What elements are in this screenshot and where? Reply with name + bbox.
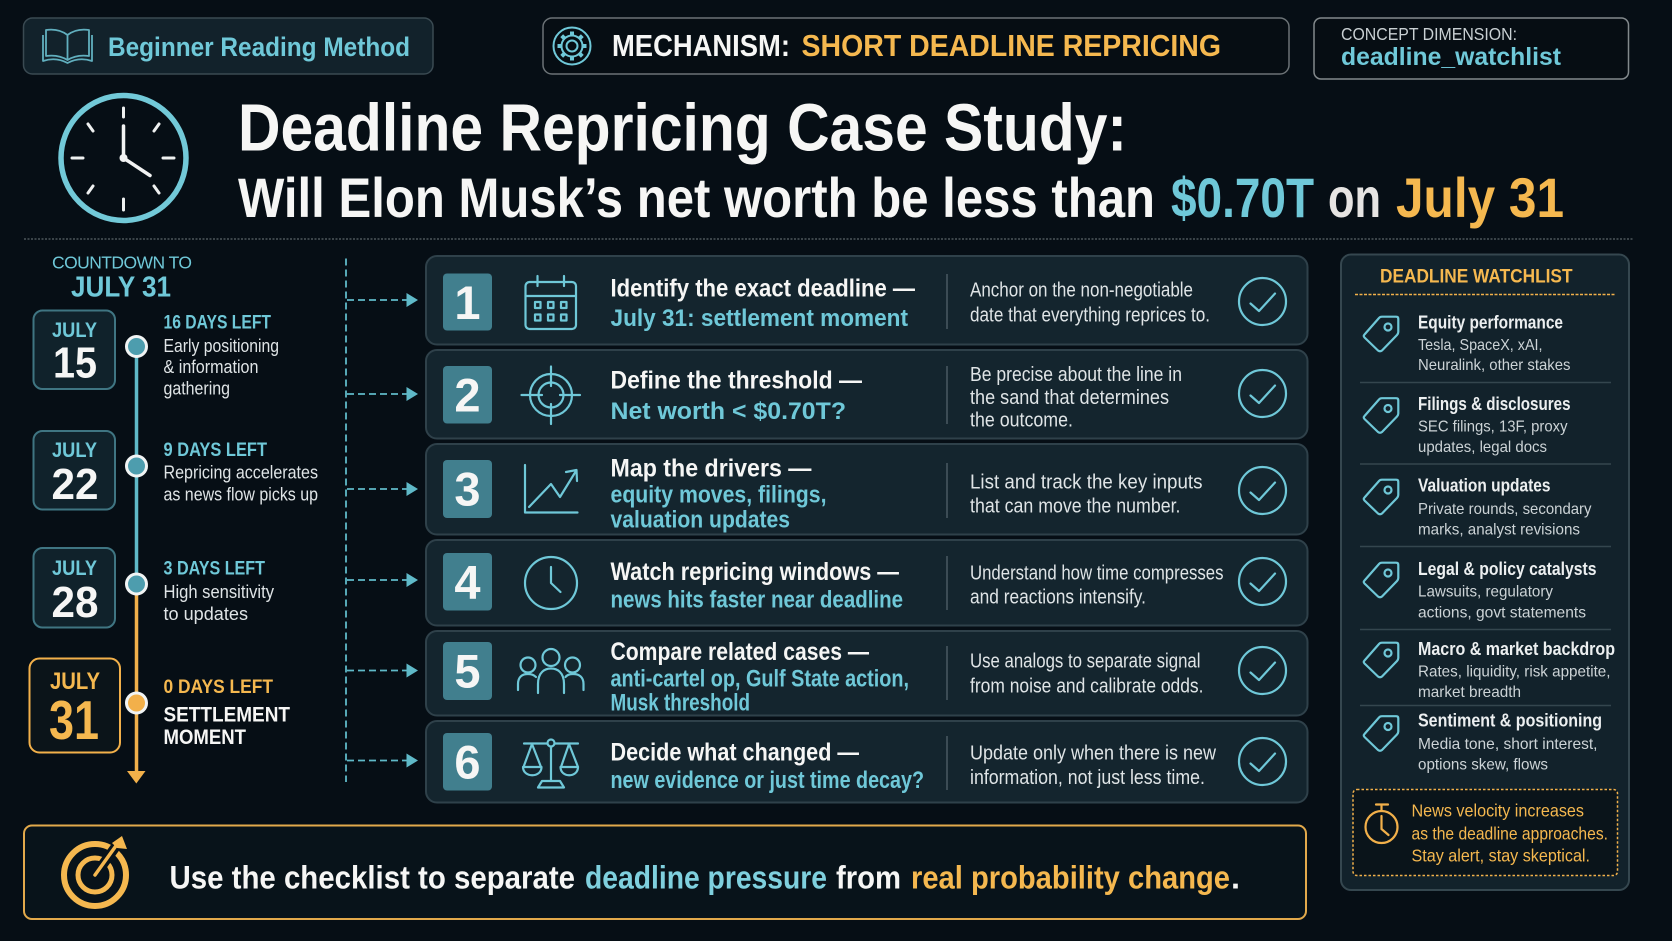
step number 3: 3 bbox=[454, 462, 481, 516]
step 6 description bbox=[970, 742, 1216, 789]
step number 4 bbox=[443, 553, 492, 610]
badge: mechanism bbox=[543, 18, 1289, 74]
panel: step 6 bbox=[426, 721, 1308, 802]
note: 16 days left: Early positioning bbox=[164, 336, 279, 356]
timeline line bbox=[127, 346, 146, 784]
takeaway text: from bbox=[836, 860, 901, 896]
date: july 15: JULY bbox=[52, 318, 97, 342]
badge label: Beginner Reading Method bbox=[108, 32, 410, 62]
item: macro and market backdrop: Macro & market backdrop bbox=[1418, 639, 1615, 659]
step 5 heading bbox=[610, 638, 909, 716]
step 2 heading: Define the threshold — bbox=[610, 366, 862, 394]
date: july 31: 31 bbox=[49, 689, 99, 751]
item: macro and market backdrop bbox=[1364, 639, 1615, 701]
item: legal and policy catalysts: Legal & policy catalysts bbox=[1418, 559, 1596, 579]
title line 2: on bbox=[1328, 166, 1381, 229]
step 4 heading: news hits faster near deadline bbox=[610, 586, 903, 614]
date: july 31: JULY bbox=[50, 668, 100, 695]
item: filings and disclosures: Filings & disclosures bbox=[1418, 394, 1570, 414]
icon: tag bbox=[1364, 317, 1398, 351]
icon: large clock bbox=[61, 96, 186, 220]
step 3 description: that can move the number. bbox=[970, 496, 1180, 518]
step 4 description bbox=[970, 562, 1224, 608]
title line 1: Deadline Repricing Case Study: bbox=[238, 90, 1127, 166]
note: 3 days left: High sensitivity bbox=[164, 582, 274, 602]
item: filings and disclosures bbox=[1364, 394, 1570, 456]
title line 2: $0.70T bbox=[1171, 166, 1314, 229]
step 4 heading: Watch repricing windows — bbox=[610, 558, 899, 586]
countdown heading bbox=[52, 252, 192, 304]
note: 16 days left: gathering bbox=[164, 378, 230, 398]
timeline nodes bbox=[126, 336, 146, 713]
item: legal and policy catalysts: Lawsuits, regulatory bbox=[1418, 584, 1553, 600]
step 1 heading bbox=[610, 274, 915, 332]
takeaway text: Use the checklist to separate bbox=[170, 860, 575, 896]
step number 6: 6 bbox=[454, 736, 481, 788]
note: 9 days left: Repricing accelerates bbox=[164, 462, 318, 482]
mechanism label: MECHANISM: bbox=[612, 28, 790, 63]
step 6 description: information, not just less time. bbox=[970, 767, 1205, 789]
icon: tag bbox=[1364, 643, 1398, 677]
item: equity performance: Equity performance bbox=[1418, 312, 1563, 332]
item: legal and policy catalysts: actions, govt statements bbox=[1418, 604, 1586, 622]
note: 16 days left bbox=[164, 312, 279, 398]
panel: deadline watchlist bbox=[1341, 254, 1629, 890]
step 6 heading: Decide what changed — bbox=[610, 738, 859, 766]
icon: check circle bbox=[1239, 370, 1286, 417]
callout: news velocity bbox=[1353, 790, 1618, 876]
concept value: deadline_watchlist bbox=[1341, 43, 1562, 71]
countdown heading: JULY 31 bbox=[71, 272, 171, 304]
panel: step 3 bbox=[426, 444, 1308, 534]
step 1 heading: Identify the exact deadline — bbox=[610, 274, 915, 302]
step number 3 bbox=[443, 460, 492, 518]
step 6 heading: new evidence or just time decay? bbox=[610, 767, 924, 794]
icon: target crosshair bbox=[522, 366, 580, 424]
icon: check circle bbox=[1239, 278, 1286, 325]
title bbox=[238, 90, 1564, 229]
step 1 heading: July 31: settlement moment bbox=[610, 305, 908, 332]
panel: step 1 bbox=[426, 256, 1308, 344]
icon: open book bbox=[43, 30, 92, 63]
icon: gear bbox=[554, 28, 590, 64]
note: 16 days left: 16 DAYS LEFT bbox=[164, 312, 271, 334]
item: sentiment and positioning: Media tone, short interest, bbox=[1418, 736, 1598, 753]
step number 5 bbox=[443, 642, 492, 700]
banner: takeaway bbox=[24, 826, 1306, 919]
countdown heading: COUNTDOWN TO bbox=[52, 252, 192, 272]
watchlist heading: DEADLINE WATCHLIST bbox=[1380, 266, 1572, 288]
badge: beginner reading method bbox=[24, 18, 433, 74]
icon: tag bbox=[1364, 480, 1398, 514]
date: july 22 bbox=[34, 431, 115, 510]
icon: people bbox=[518, 649, 584, 693]
panel: countdown timeline bbox=[30, 252, 318, 784]
badge: concept dimension bbox=[1314, 18, 1628, 79]
item: valuation updates bbox=[1364, 476, 1592, 538]
step 3 heading: Map the drivers — bbox=[610, 454, 812, 482]
step number 4: 4 bbox=[454, 556, 481, 608]
icon: tag bbox=[1364, 398, 1398, 433]
step 2 description: Be precise about the line in bbox=[970, 364, 1182, 386]
panel: step 4 bbox=[426, 540, 1308, 626]
item: equity performance: Neuralink, other stakes bbox=[1418, 357, 1570, 374]
note: 9 days left bbox=[164, 439, 318, 504]
icon: check circle bbox=[1239, 738, 1286, 785]
step 6 heading bbox=[610, 738, 924, 794]
icon: check circle bbox=[1239, 647, 1286, 694]
item: equity performance bbox=[1364, 312, 1570, 374]
item: sentiment and positioning: options skew, flows bbox=[1418, 756, 1548, 774]
step 5 heading: Compare related cases — bbox=[610, 638, 869, 666]
note: 0 days left bbox=[164, 676, 290, 749]
step 6 description: Update only when there is new bbox=[970, 742, 1216, 764]
step 2 description bbox=[970, 364, 1182, 432]
note: 9 days left: 9 DAYS LEFT bbox=[164, 439, 267, 461]
icon: clock bbox=[525, 557, 577, 609]
note: 0 days left: SETTLEMENT bbox=[164, 704, 290, 726]
icon: stopwatch bbox=[1366, 804, 1398, 843]
note: 16 days left: & information bbox=[164, 357, 258, 377]
takeaway text: deadline pressure bbox=[585, 860, 827, 896]
step 2 heading bbox=[610, 366, 862, 425]
title line 2: Will Elon Musk’s net worth be less than bbox=[238, 166, 1155, 229]
note: 3 days left: to updates bbox=[164, 604, 248, 624]
step 1 description: Anchor on the non-negotiable bbox=[970, 280, 1193, 302]
step number 2 bbox=[443, 366, 492, 424]
step 1 description: date that everything reprices to. bbox=[970, 304, 1210, 326]
step number 6 bbox=[443, 733, 492, 790]
takeaway text bbox=[170, 860, 1240, 896]
date: july 22: JULY bbox=[52, 438, 97, 462]
note: 3 days left: 3 DAYS LEFT bbox=[164, 558, 265, 580]
icon: tag bbox=[1364, 563, 1398, 597]
callout: news velocity: News velocity increases bbox=[1412, 800, 1584, 820]
step 4 heading bbox=[610, 558, 903, 614]
step 3 heading bbox=[610, 454, 826, 534]
item: legal and policy catalysts bbox=[1364, 559, 1596, 622]
step number 2: 2 bbox=[454, 368, 481, 422]
note: 0 days left: MOMENT bbox=[164, 726, 246, 749]
note: 0 days left: 0 DAYS LEFT bbox=[164, 676, 273, 698]
step 3 heading: equity moves, filings, bbox=[610, 482, 826, 508]
title line 2: July 31 bbox=[1396, 166, 1564, 229]
item: valuation updates: Private rounds, secondary bbox=[1418, 501, 1592, 518]
step number 1: 1 bbox=[454, 276, 481, 329]
item: valuation updates: marks, analyst revisions bbox=[1418, 522, 1580, 538]
step 3 heading: valuation updates bbox=[610, 506, 790, 534]
item: filings and disclosures: updates, legal docs bbox=[1418, 439, 1547, 456]
date: july 31 bbox=[30, 658, 120, 752]
step 5 description: Use analogs to separate signal bbox=[970, 650, 1200, 672]
mechanism value: SHORT DEADLINE REPRICING bbox=[802, 28, 1221, 63]
note: 9 days left: as news flow picks up bbox=[164, 484, 318, 504]
item: filings and disclosures: SEC filings, 13F, proxy bbox=[1418, 418, 1568, 436]
date: july 22: 22 bbox=[52, 460, 98, 509]
item: equity performance: Tesla, SpaceX, xAI, bbox=[1418, 337, 1542, 354]
date: july 28: 28 bbox=[52, 578, 98, 627]
icon: target with arrow bbox=[64, 836, 127, 906]
takeaway text: . bbox=[1231, 860, 1240, 896]
panel: step 5 bbox=[426, 631, 1308, 716]
step 2 description: the outcome. bbox=[970, 410, 1073, 432]
step 3 description: List and track the key inputs bbox=[970, 472, 1202, 494]
step number 5: 5 bbox=[454, 644, 481, 698]
panel: step 2 bbox=[426, 350, 1308, 438]
date: july 28 bbox=[34, 548, 115, 628]
step number 1 bbox=[443, 274, 492, 330]
date: july 15 bbox=[34, 310, 115, 389]
icon: check circle bbox=[1239, 558, 1286, 605]
date: july 15: 15 bbox=[53, 338, 97, 388]
step 5 description bbox=[970, 650, 1204, 698]
step 1 description bbox=[970, 280, 1210, 326]
item: valuation updates: Valuation updates bbox=[1418, 476, 1550, 496]
item: sentiment and positioning bbox=[1364, 710, 1602, 774]
icon: line chart bbox=[525, 465, 578, 512]
icon: calendar bbox=[526, 276, 576, 329]
arrows: timeline to steps bbox=[346, 258, 418, 782]
icon: balance scales bbox=[523, 740, 578, 788]
step 5 description: from noise and calibrate odds. bbox=[970, 676, 1204, 698]
step 2 description: the sand that determines bbox=[970, 387, 1169, 409]
icon: check circle bbox=[1239, 467, 1286, 514]
note: 3 days left bbox=[164, 558, 274, 624]
step 4 description: Understand how time compresses bbox=[970, 562, 1224, 584]
step 5 heading: anti-cartel op, Gulf State action, bbox=[610, 666, 909, 692]
step 4 description: and reactions intensify. bbox=[970, 586, 1146, 608]
item: sentiment and positioning: Sentiment & positioning bbox=[1418, 710, 1602, 730]
item: macro and market backdrop: Rates, liquidity, risk appetite, bbox=[1418, 664, 1610, 680]
date: july 28: JULY bbox=[52, 556, 97, 580]
step 5 heading: Musk threshold bbox=[610, 690, 750, 716]
step 2 heading: Net worth < $0.70T? bbox=[610, 398, 846, 425]
icon: tag bbox=[1364, 716, 1398, 751]
callout: news velocity: as the deadline approaches. bbox=[1412, 824, 1608, 844]
step 3 description bbox=[970, 472, 1202, 518]
callout: news velocity: Stay alert, stay skeptical. bbox=[1412, 846, 1590, 866]
concept label: CONCEPT DIMENSION: bbox=[1341, 24, 1517, 44]
takeaway text: real probability change bbox=[911, 860, 1230, 896]
item: macro and market backdrop: market breadth bbox=[1418, 684, 1521, 701]
